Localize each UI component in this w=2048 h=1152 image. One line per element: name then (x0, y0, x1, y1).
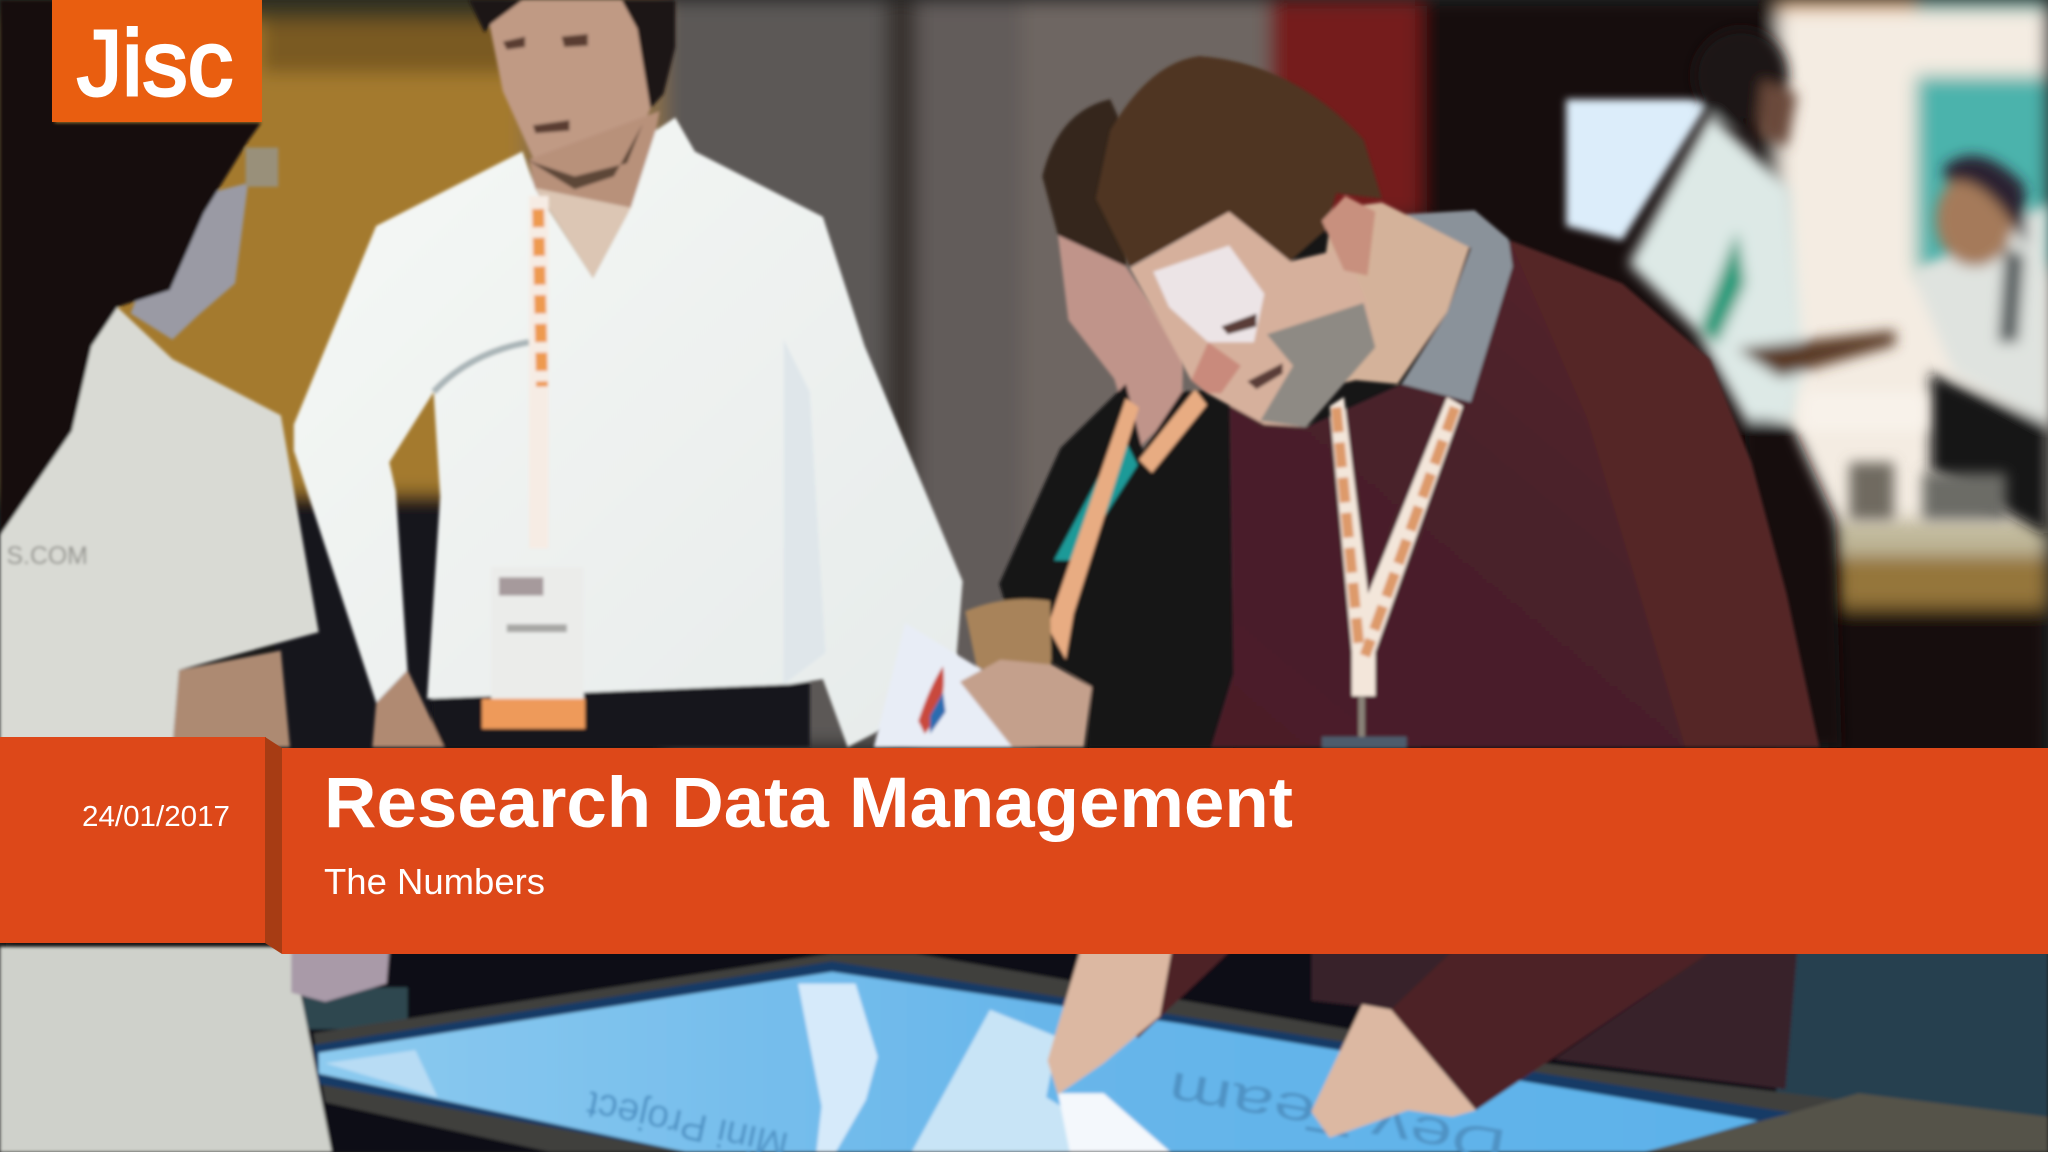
conference name badge (482, 567, 585, 729)
face (1130, 212, 1375, 427)
items on table corner (1644, 1093, 2048, 1152)
programme booklet and hand (874, 623, 1092, 747)
illuminated blue table screen (319, 972, 1758, 1152)
blurred glassware on buffet table (1802, 392, 2006, 520)
title banner (282, 748, 2048, 954)
man's torso below band (1311, 951, 1797, 1089)
background blue display screen (1566, 99, 1711, 240)
lower section of photo: touch-screen table (0, 947, 2048, 1152)
burgundy jumper sleeves (1126, 951, 1712, 1110)
title: Research Data Management (324, 764, 1293, 843)
reflections on table screen (325, 984, 1170, 1152)
white shirt hem below band (0, 947, 332, 1152)
white and orange lanyard (1330, 397, 1463, 738)
table frame (313, 953, 1842, 1152)
neck (1306, 202, 1471, 392)
hands touching screen (1048, 951, 1476, 1138)
date panel (0, 737, 266, 943)
background person in white shirt (1629, 29, 1895, 747)
orange and white lanyard (529, 196, 549, 549)
person on left: white t-shirt and dark hair (0, 0, 319, 747)
elbow of person on left (291, 951, 389, 1002)
date panel: 24/01/2017 (82, 801, 230, 833)
woman in black jacket (874, 99, 1234, 747)
subtitle: The Numbers (324, 861, 545, 902)
logo: Jisc (52, 0, 262, 122)
background woman in apron and white top (1912, 156, 2048, 536)
badge holder clip (1322, 737, 1407, 748)
blue-grey shirt collar (1401, 210, 1512, 402)
woman's orange lanyard (1048, 389, 1207, 660)
ribbon fold (265, 737, 282, 954)
person on left: white t-shirt and dark hair: S.COM (7, 543, 88, 570)
coffee cup (965, 599, 1051, 669)
man in white shirt (294, 0, 963, 747)
ear (1322, 196, 1375, 276)
man leaning over table in burgundy jumper (1096, 56, 1819, 748)
short brown hair (1096, 56, 1382, 266)
logo: Jisc: Jisc (77, 11, 233, 115)
